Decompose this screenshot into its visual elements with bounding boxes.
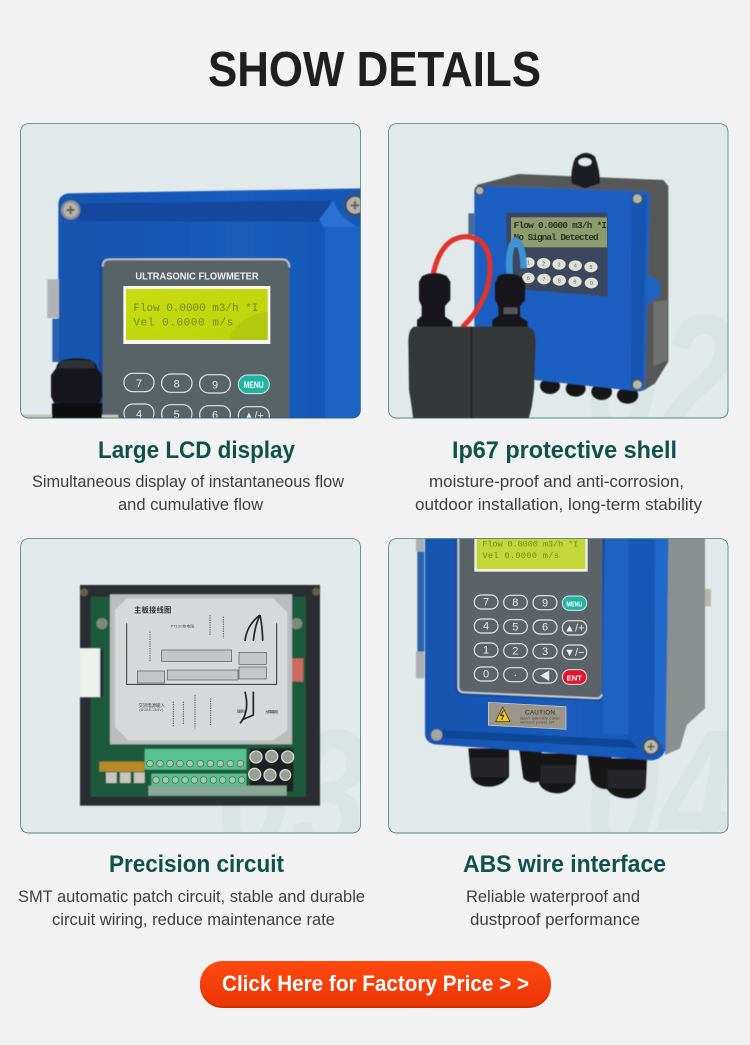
LCD screen: Flow 0.0000 m3/h *I: [133, 303, 258, 315]
keypad keys: ·: [513, 669, 517, 681]
panel: IP67 protective shell: [388, 123, 728, 418]
keypad keys: ▲/+: [564, 623, 585, 635]
description: LCD: [32, 473, 344, 514]
keypad buttons: 6: [527, 276, 530, 282]
keypad keys: 0: [483, 669, 489, 681]
panel border: [20, 538, 361, 833]
photo: complete flowmeter: [468, 153, 668, 404]
keypad keys: [124, 373, 269, 425]
description: interface: [466, 888, 640, 929]
keypad buttons: 0: [590, 281, 593, 287]
description: circuit: circuit wiring, reduce maintenance rate: [52, 911, 335, 929]
keypad keys: 3: [542, 646, 548, 658]
keypad keys: ▲/+: [243, 410, 264, 422]
title: SHOW DETAILS: [208, 43, 541, 97]
LCD screen: Vel 0.0000 m/s: [482, 551, 559, 561]
keypad title: ULTRASONIC FLOWMETER: [135, 271, 259, 282]
description: interface: dustproof performance: [470, 911, 640, 929]
wiring diagram: 屏蔽线: [237, 708, 246, 713]
keypad buttons: 1: [527, 261, 530, 267]
LCD screen: No Signal Detected: [514, 232, 599, 243]
wiring diagram: 交流电源输入: [138, 702, 165, 709]
panel: large LCD display: [20, 123, 366, 425]
keypad keys: [474, 595, 587, 684]
screw terminals: [249, 750, 294, 781]
button: factory price: [200, 961, 551, 1008]
keypad keys: 5: [512, 621, 518, 633]
LCD screen: [511, 217, 607, 247]
keypad keys: MENU: [244, 380, 264, 390]
caution plate: [488, 702, 566, 729]
keypad keys: 1: [483, 645, 489, 657]
caution plate: without power off: [520, 721, 555, 725]
panel: precision circuit: [20, 538, 361, 834]
heading: Precision circuit: Precision circuit: [109, 851, 284, 878]
description: shell: outdoor installation, long-term stability: [415, 496, 703, 514]
button: factory price: Click Here for Factory Price > >: [222, 971, 529, 996]
keypad buttons: 2: [542, 261, 545, 267]
caution plate: CAUTION: [525, 709, 555, 716]
photo: flowmeter lower body: [416, 537, 711, 798]
terminal blocks: [147, 760, 245, 783]
keypad keys: 2: [512, 645, 518, 657]
wiring diagram: [127, 604, 279, 728]
keypad keys: 5: [174, 409, 180, 421]
description: shell: [415, 473, 703, 514]
description: interface: Reliable waterproof and: [466, 888, 640, 906]
LCD screen: Flow 0.0000 m3/h *I: [514, 220, 607, 231]
heading: Large LCD display: Large LCD display: [98, 437, 296, 464]
keypad buttons: 8: [558, 278, 561, 284]
keypad keys: 6: [542, 622, 548, 634]
keypad keys: ▼/−: [564, 647, 585, 659]
keypad buttons: [522, 257, 598, 288]
keypad buttons: 9: [573, 280, 577, 286]
keypad buttons: 5: [589, 265, 593, 271]
LCD screen: Flow 0.0000 m3/h *I: [482, 540, 578, 550]
description: LCD: Simultaneous display of instantaneous flow: [32, 473, 344, 491]
wiring diagram: 主板接线图: [134, 604, 171, 615]
description: circuit: SMT automatic patch circuit, stable and durable: [18, 888, 365, 906]
wiring diagram: PT100热电阻: [171, 624, 194, 629]
sensor with cables: [408, 237, 536, 420]
keypad keys: 8: [512, 597, 518, 609]
cable gland: [20, 358, 118, 420]
keypad keys: 9: [212, 379, 218, 391]
caution plate: Don't open the cover: [520, 716, 560, 720]
keypad buttons: 3: [557, 262, 561, 268]
LCD screen: [123, 286, 270, 344]
keypad keys: ◀: [539, 670, 550, 683]
panel: ABS wire interface: [388, 538, 728, 834]
photo: flowmeter close-up: [47, 188, 366, 420]
keypad keys: 6: [212, 410, 218, 422]
keypad keys: 7: [136, 378, 142, 390]
LCD screen: Vel 0.0000 m/s: [133, 318, 233, 330]
panel border: [20, 123, 361, 418]
LCD screen: [474, 537, 588, 572]
keypad buttons: 4: [574, 264, 577, 270]
keypad keys: 8: [174, 379, 180, 391]
keypad keys: 9: [542, 597, 548, 609]
panel border: [388, 538, 728, 833]
keypad keys: ENT: [567, 673, 582, 682]
description: LCD: and cumulative flow: [118, 496, 263, 514]
keypad keys: 4: [483, 621, 489, 633]
heading: Ip67 protective shell: Ip67 protective shell: [452, 437, 677, 464]
photo: circuit board: [80, 585, 320, 806]
panel border: [388, 123, 728, 418]
watermark: 03: 03: [217, 693, 367, 894]
keypad keys: 4: [136, 408, 142, 420]
description: circuit: [18, 888, 365, 929]
wiring diagram: (AC85-264V): [139, 708, 163, 712]
keypad keys: MENU: [566, 599, 583, 608]
description: shell: moisture-proof and anti-corrosion,: [429, 473, 684, 491]
heading: ABS wire interface: ABS wire interface: [463, 851, 666, 878]
keypad buttons: 7: [542, 277, 546, 283]
wiring diagram: 大屏幕套用: [265, 709, 279, 714]
keypad keys: 7: [483, 597, 489, 609]
